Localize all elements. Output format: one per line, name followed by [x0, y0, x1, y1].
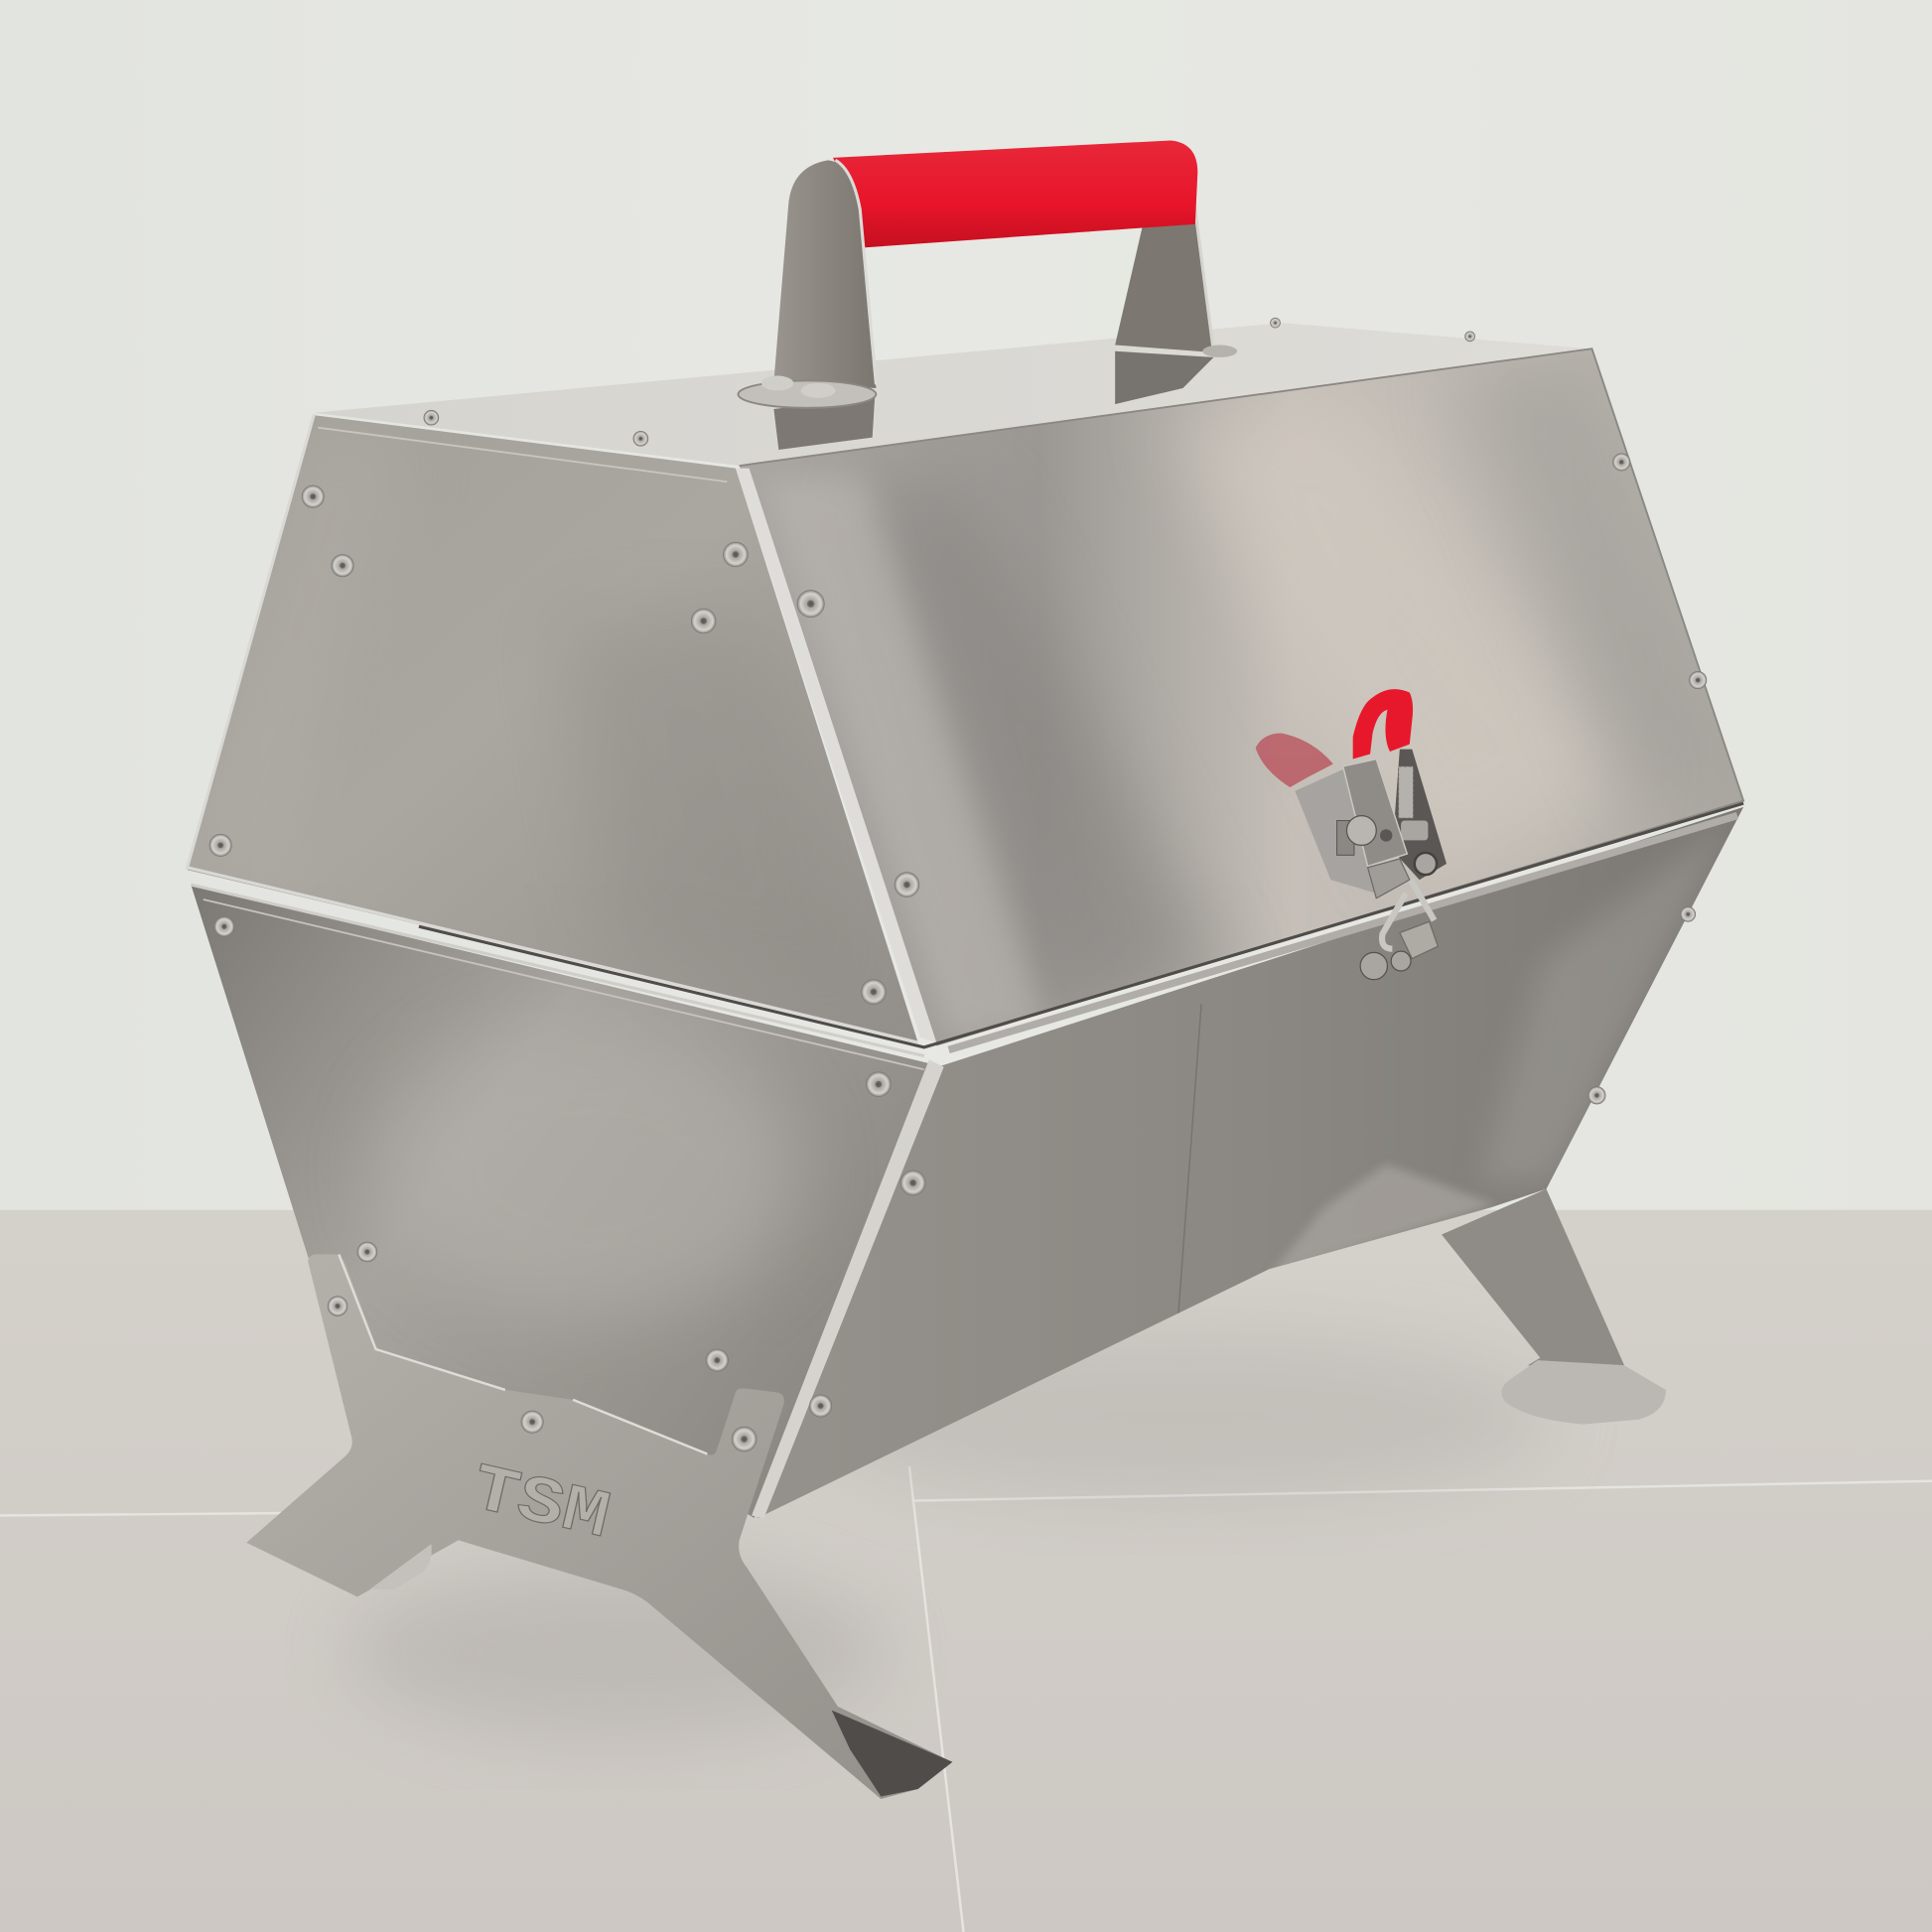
floor with tile joints — [0, 1210, 1932, 1932]
red grip — [833, 140, 1197, 247]
back leg and foot — [1442, 1189, 1666, 1425]
base plate — [738, 380, 876, 408]
corner edge of upper lid — [736, 469, 936, 1042]
gap between lid and base — [419, 803, 1743, 1047]
top of lid — [314, 323, 1589, 466]
front leg plate with logo — [246, 1254, 952, 1799]
upper side panel — [185, 414, 918, 1042]
lower side panel — [191, 885, 939, 1518]
grill — [185, 140, 1743, 1799]
far handle bracket — [1115, 191, 1213, 352]
latch with red lever — [1337, 689, 1447, 980]
red lever grip — [1353, 689, 1413, 759]
wall background — [0, 0, 1932, 1210]
upper long panel — [740, 348, 1743, 1044]
handle reflection on lid — [773, 397, 875, 450]
near handle bracket — [773, 160, 876, 388]
latch back plate — [1392, 750, 1447, 880]
lower long panel — [758, 807, 1743, 1518]
wire loop — [1382, 880, 1435, 949]
rivets — [209, 318, 1707, 1451]
TSM logo: TSM — [465, 1452, 617, 1557]
lock block — [1368, 859, 1410, 898]
handle — [738, 140, 1237, 408]
latch reflection — [1256, 733, 1376, 894]
corner edge of lower base — [752, 1059, 944, 1518]
spring — [1399, 766, 1414, 818]
lever plate — [1343, 759, 1407, 866]
latch feet — [1360, 952, 1387, 980]
